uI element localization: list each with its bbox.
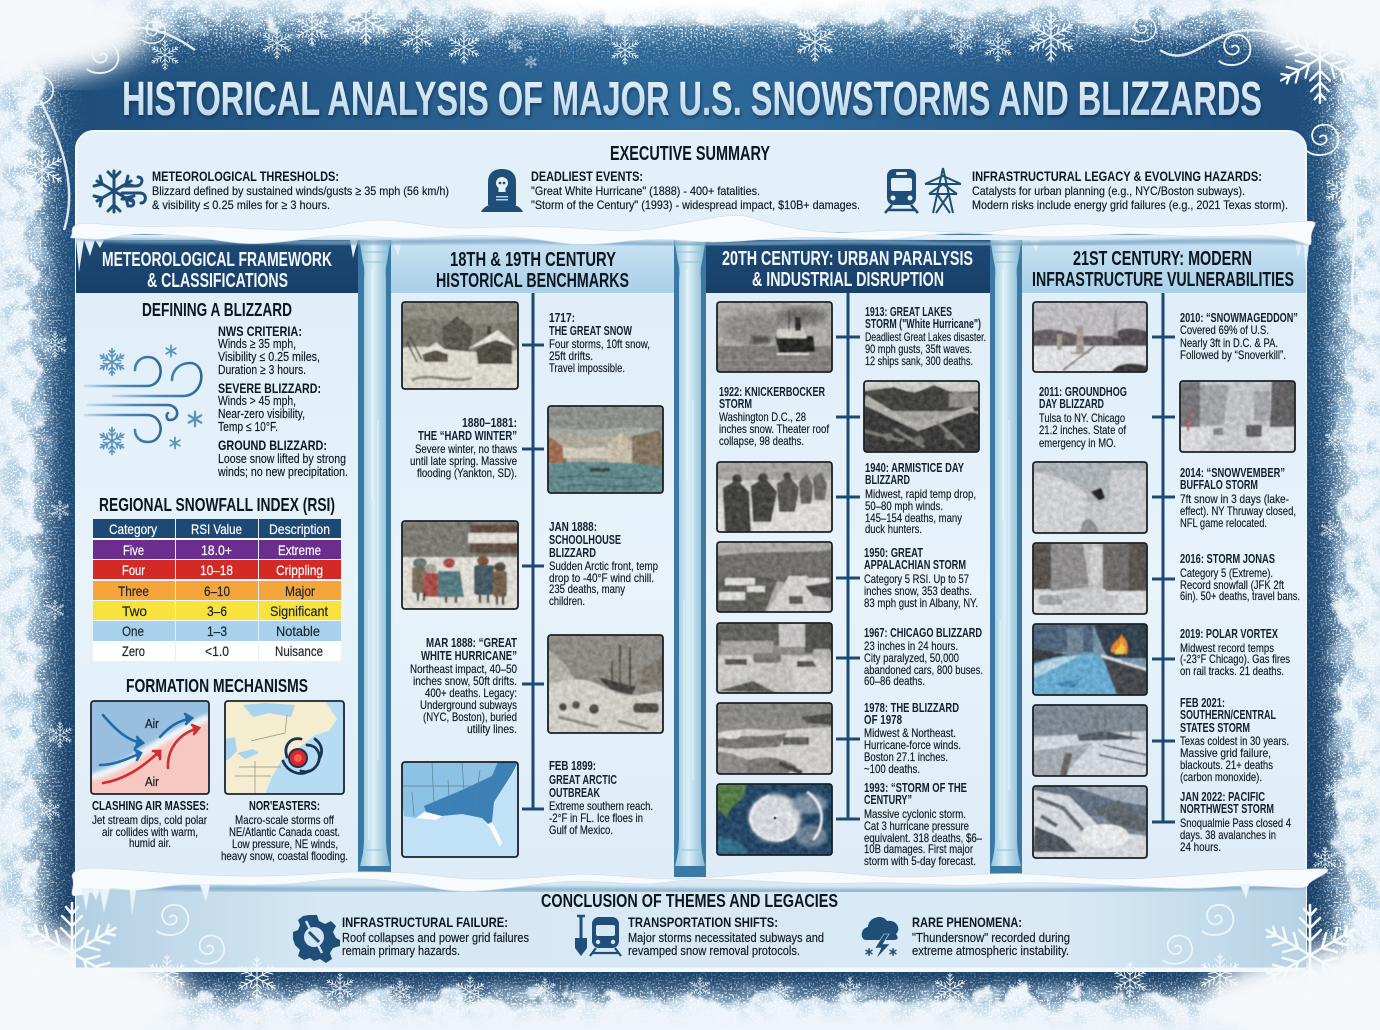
table: RSI categories: Significant — [270, 603, 328, 619]
text: rare phenomena: RARE PHENOMENA: — [912, 914, 1022, 930]
text: infrastructural failure: INFRASTRUCTURAL FAILURE: — [342, 914, 508, 930]
heading band: column 1: METEOROLOGICAL FRAMEWORK — [102, 249, 332, 271]
spine and ticks — [522, 293, 544, 810]
timeline: 21st century — [1033, 293, 1300, 858]
text: nor'easters: NE/Atlantic Canada coast. — [229, 825, 340, 839]
text: NWS criteria — [218, 323, 320, 377]
heading: RSI: REGIONAL SNOWFALL INDEX (RSI) — [99, 494, 335, 515]
text: 2019 — [1180, 627, 1290, 678]
text: 1950 — [864, 546, 978, 610]
text: 1880-1881: flooding (Yankton, SD). — [417, 466, 517, 480]
text: 1717 — [549, 311, 650, 375]
table: RSI categories: 3–6 — [207, 603, 227, 619]
text: 1978: Hurricane-force winds. — [864, 738, 961, 752]
text: infrastructural failure: remain primary hazards. — [342, 943, 460, 958]
text: Feb 2021 — [1180, 696, 1289, 784]
text: infrastructural failure — [342, 914, 529, 958]
text: 1940: 50–80 mph winds. — [865, 499, 943, 513]
text: Feb 2021: Texas coldest in 30 years. — [1180, 734, 1289, 748]
text: severe blizzard: SEVERE BLIZZARD: — [218, 380, 321, 396]
text: 1978: Boston 27.1 inches. — [864, 750, 948, 764]
text: clashing air masses: air collides with warm, — [102, 825, 198, 839]
text: Feb 2021: STATES STORM — [1180, 721, 1250, 735]
text: Mar 1888: WHITE HURRICANE” — [421, 649, 517, 663]
text: Feb 1899: GREAT ARCTIC — [549, 773, 617, 787]
text: 1940: 1940: ARMISTICE DAY — [865, 461, 964, 475]
text: 2010: 2010: “SNOWMAGEDDON” — [1180, 311, 1298, 325]
text: severe blizzard: Winds > 45 mph, — [218, 393, 296, 408]
text: infrastructural legacy — [972, 168, 1288, 212]
text: ground blizzard: Loose snow lifted by strong — [218, 451, 346, 466]
table: RSI categories: Crippling — [276, 562, 323, 578]
photo: 1717 snowy cottages — [402, 302, 518, 389]
icon: shovel and train — [575, 916, 621, 956]
text: ground blizzard: GROUND BLIZZARD: — [218, 437, 327, 453]
table: RSI categories: 18.0+ — [201, 542, 232, 558]
text: 1913: 1913: GREAT LAKES — [865, 305, 952, 319]
text: deadliest events — [531, 168, 860, 212]
photo: Mar 1888 ships in snow — [548, 635, 663, 733]
table: RSI categories: Category — [109, 521, 157, 537]
table: RSI categories: Three — [118, 583, 149, 599]
text: 2016: Record snowfall (JFK 2ft — [1180, 578, 1285, 592]
text: severe blizzard: Near-zero visibility, — [218, 406, 305, 421]
heading band: column 1 — [76, 238, 358, 293]
text: 1880-1881: until late spring. Massive — [410, 454, 517, 468]
photo: 2021 power grid in ice — [1033, 705, 1147, 776]
text: 2014: effect). NY Thruway closed, — [1180, 504, 1296, 518]
text: 1978: OF 1978 — [864, 713, 902, 727]
text: 1717: 1717: — [549, 311, 575, 325]
diagram: clashing air masses: Air — [145, 774, 160, 789]
heading band: column 1: & CLASSIFICATIONS — [147, 270, 288, 292]
text: 2016: 2016: STORM JONAS — [1180, 552, 1275, 566]
text: 1978: Midwest & Northeast. — [864, 726, 956, 740]
heading band: column 2: HISTORICAL BENCHMARKS — [436, 270, 629, 292]
text: Feb 1899 — [549, 759, 653, 837]
photo: 1978 stormy coast — [717, 703, 832, 774]
text: clashing air masses: CLASHING AIR MASSES: — [92, 798, 209, 813]
pillar strips background — [76, 232, 1306, 877]
text: Feb 1899: FEB 1899: — [549, 759, 596, 773]
table: RSI categories: 6–10 — [204, 583, 230, 599]
text: 1717: Travel impossible. — [549, 361, 625, 375]
text: rare phenomena: extreme atmospheric instability. — [912, 943, 1069, 958]
heading band: column 2: 18TH & 19TH CENTURY — [450, 249, 616, 271]
text: Feb 2021: SOUTHERN/CENTRAL — [1180, 708, 1276, 722]
text: 1978: ~100 deaths. — [864, 762, 920, 776]
icon: tombstone — [481, 169, 523, 212]
photo: 2019 frozen tracks with fire — [1033, 624, 1147, 695]
timeline: 20th century — [717, 293, 986, 868]
text: 2011: 21.2 inches. State of — [1039, 423, 1127, 437]
diagram: clashing air masses — [91, 701, 209, 794]
text: Jan 2022: days. 38 avalanches in — [1180, 828, 1276, 842]
ice pillars — [359, 238, 1022, 866]
text: 1913: Deadliest Great Lakes disaster. — [865, 330, 986, 344]
text: NWS criteria: Visibility ≤ 0.25 miles, — [218, 349, 320, 364]
text: meteorological thresholds: & visibility ≤ 0.25 miles for ≥ 3 hours. — [152, 198, 330, 212]
map: 1899 arctic outbreak — [402, 762, 518, 857]
panel: executive summary — [94, 143, 1288, 213]
photo: 2014 snow walls — [1033, 462, 1147, 533]
text: transportation shifts: TRANSPORTATION SHIFTS: — [628, 914, 778, 930]
text: NWS criteria: NWS CRITERIA: — [218, 323, 302, 339]
text: 2010 — [1180, 311, 1298, 362]
text: ground blizzard: winds; no new precipitation. — [217, 464, 348, 479]
panel: column 2 body — [391, 292, 674, 877]
text: deadliest events: DEADLIEST EVENTS: — [531, 168, 643, 184]
section: defining a blizzard — [85, 299, 348, 479]
text: 1922: STORM — [719, 397, 752, 411]
diagram: clashing air masses: Air — [145, 716, 160, 731]
table: RSI categories — [93, 519, 341, 661]
text: Feb 1899: OUTBREAK — [549, 786, 600, 800]
text: ground blizzard — [217, 437, 348, 479]
text: 1940: BLIZZARD — [865, 473, 910, 487]
photo: 1880 flooded town — [548, 406, 663, 493]
photo: 1940 hunters in snow — [717, 462, 832, 532]
text: 1717: THE GREAT SNOW — [549, 324, 632, 338]
text: 1940: duck hunters. — [865, 522, 922, 536]
text: 1950: Category 5 RSI. Up to 57 — [864, 572, 969, 586]
spine and ticks — [1152, 293, 1175, 823]
text: 1993: equivalent. 318 deaths, $6– — [864, 831, 982, 845]
text: 2019: 2019: POLAR VORTEX — [1180, 627, 1278, 641]
heading: executive summary: EXECUTIVE SUMMARY — [610, 143, 770, 165]
illustration: blizzard wind and snowflakes — [85, 346, 201, 454]
text: severe blizzard: Temp ≤ 10°F. — [218, 419, 278, 434]
text: NWS criteria: Winds ≥ 35 mph, — [218, 336, 296, 351]
table: RSI categories: 10–18 — [200, 562, 233, 578]
text: 1922: inches snow. Theater roof — [719, 422, 830, 436]
text: 1940: Midwest, rapid temp drop, — [865, 487, 976, 501]
text: infrastructural failure: Roof collapses and power grid failures — [342, 930, 529, 945]
text: 1950: APPALACHIAN STORM — [864, 558, 966, 572]
table: RSI categories: Nuisance — [275, 643, 323, 659]
text: 1967: abandoned cars, 800 buses. — [864, 663, 983, 677]
text: nor'easters: heavy snow, coastal flooding. — [221, 849, 348, 863]
photo: 1888 children in snow — [402, 521, 518, 609]
table: RSI categories: Four — [122, 562, 145, 578]
icon: thundersnow cloud — [862, 917, 898, 959]
text: 2014 — [1180, 466, 1296, 530]
text: transportation shifts: revamped snow removal protocols. — [628, 943, 800, 958]
text: clashing air masses — [92, 798, 209, 850]
text: 1967: 23 inches in 24 hours. — [864, 639, 958, 653]
heading band: column 4: 21ST CENTURY: MODERN — [1073, 248, 1252, 270]
text: 1993: Massive cyclonic storm. — [864, 807, 966, 821]
text: transportation shifts — [628, 914, 824, 958]
text: 1940 — [865, 461, 976, 536]
text: 1922: collapse, 98 deaths. — [719, 434, 804, 448]
heading band: column 3: & INDUSTRIAL DISRUPTION — [752, 269, 944, 291]
table: RSI categories: Two — [122, 603, 147, 619]
heading band: column 3: 20TH CENTURY: URBAN PARALYSIS — [722, 248, 973, 270]
text: transportation shifts: Major storms necessitated subways and — [628, 930, 824, 945]
text: Jan 2022: Snoqualmie Pass closed 4 — [1180, 816, 1291, 830]
text: nor'easters: NOR'EASTERS: — [249, 798, 320, 813]
text: 2010: Nearly 3ft in D.C. & PA. — [1180, 336, 1278, 350]
text: 1967: City paralyzed, 50,000 — [864, 651, 959, 665]
text: Jan 2022: 24 hours. — [1180, 840, 1221, 854]
text: 1922: Washington D.C., 28 — [719, 410, 806, 424]
heading: conclusion: CONCLUSION OF THEMES AND LEGACIES — [541, 890, 838, 911]
text: deadliest events: "Storm of the Century" (1993) - widespread impact, $10B+ damages. — [531, 198, 860, 212]
table: RSI categories: 1–3 — [207, 623, 227, 639]
text: nor'easters: Macro-scale storms off — [235, 813, 335, 827]
text: 1913 — [865, 305, 986, 368]
text: meteorological thresholds — [152, 168, 449, 212]
text: Feb 1899: -2°F in FL. Ice floes in — [549, 811, 643, 825]
text: Jan 2022 — [1180, 790, 1291, 854]
text: 2014: 2014: “SNOWVEMBER” — [1180, 466, 1285, 480]
text: 1880-1881: 1880–1881: — [462, 416, 517, 430]
text: Mar 1888: Underground subways — [420, 698, 517, 712]
text: Jan 1888: 235 deaths, many — [549, 582, 625, 596]
icon: snowflake with wind — [94, 171, 145, 212]
panel: column 3 body — [706, 292, 990, 877]
text: 1967: 60–86 deaths. — [864, 674, 925, 688]
text: Jan 1888: drop to -40°F wind chill. — [549, 571, 654, 585]
text: 2010: Followed by “Snoverkill”. — [1180, 348, 1286, 362]
map: nor'easter — [225, 701, 344, 794]
text: Mar 1888: utility lines. — [467, 722, 517, 736]
text: 1880-1881: THE “HARD WINTER” — [418, 429, 517, 443]
text: 1950: 83 mph gust in Albany, NY. — [864, 596, 978, 610]
text: clashing air masses: Jet stream dips, cold polar — [92, 813, 207, 827]
text: 1913: 90 mph gusts, 35ft waves. — [865, 342, 972, 356]
text: Jan 1888: BLIZZARD — [549, 546, 596, 560]
text: 2019: (-23°F Chicago). Gas fires — [1180, 652, 1290, 666]
text: clashing air masses: humid air. — [129, 836, 171, 850]
heading band: column 3 — [706, 238, 990, 293]
photo: 2022 avalanche — [1033, 786, 1147, 858]
text: 1880-1881: Severe winter, no thaws — [415, 442, 517, 456]
text: 1880-1881 — [410, 416, 517, 480]
text: 2016: Category 5 (Extreme). — [1180, 566, 1273, 580]
text: Mar 1888: inches snow, 50ft drifts. — [413, 674, 517, 688]
text: infrastructural legacy: Modern risks include energy grid failures (e.g., 2021 Texas storm). — [972, 198, 1288, 212]
timeline: 18th and 19th century — [402, 293, 663, 857]
photo: 2011 snowy avenue — [1180, 381, 1295, 452]
text: meteorological thresholds: METEOROLOGICAL THRESHOLDS: — [152, 168, 339, 184]
text: severe blizzard — [218, 380, 321, 434]
table: RSI categories: Five — [123, 542, 144, 558]
text: 2019: Midwest record temps — [1180, 641, 1274, 655]
text: 2011: emergency in MO. — [1039, 436, 1116, 450]
text: nor'easters — [221, 798, 348, 863]
photo: 1913 steamship — [717, 302, 832, 372]
text: 1967 — [864, 626, 983, 688]
text: 1913: 12 ships sank, 300 deaths. — [865, 354, 973, 368]
heading: defining a blizzard: DEFINING A BLIZZARD — [142, 299, 292, 320]
text: 2016: 6in). 50+ deaths, travel bans. — [1180, 589, 1300, 603]
text: Mar 1888: MAR 1888: “GREAT — [426, 636, 517, 650]
text: 1993: Cat 3 hurricane pressure — [864, 819, 969, 833]
text: Feb 2021: (carbon monoxide). — [1180, 770, 1262, 784]
panel: column 1 body — [76, 292, 358, 877]
text: 1717: 25ft drifts. — [549, 349, 593, 363]
frost snowflakes and swirls, bottom corners — [23, 903, 1359, 1008]
text: Jan 1888 — [549, 520, 658, 608]
photo: 1950 snowy town — [717, 542, 832, 612]
text: 1950: inches snow, 353 deaths. — [864, 584, 972, 598]
text: 1993: 1993: “STORM OF THE — [864, 781, 967, 795]
snow ledge: bottom — [72, 868, 1328, 896]
text: Jan 1888: JAN 1888: — [549, 520, 597, 534]
table: RSI categories: Notable — [276, 623, 320, 639]
icon: broken gear — [293, 915, 340, 963]
spine and ticks — [836, 293, 860, 820]
text: 1978 — [864, 701, 961, 776]
text: nor'easters: Low pressure, NE winds, — [232, 837, 338, 851]
text: 1922: 1922: KNICKERBOCKER — [719, 385, 825, 399]
table: RSI categories: <1.0 — [205, 643, 229, 659]
text: 2011: 2011: GROUNDHOG — [1039, 385, 1127, 399]
text: 1940: 145–154 deaths, many — [865, 511, 962, 525]
table: RSI categories: Major — [285, 583, 315, 599]
text: 1950: 1950: GREAT — [864, 546, 923, 560]
text: Mar 1888: Northeast impact, 40–50 — [410, 662, 517, 676]
photo: 1922 collapsed theater — [864, 381, 979, 452]
text: meteorological thresholds: Blizzard defined by sustained winds/gusts ≥ 35 mph (56 km/h) — [152, 184, 449, 198]
text: 2014: BUFFALO STORM — [1180, 478, 1258, 492]
text: 2011 — [1039, 385, 1127, 450]
text: rare phenomena — [912, 914, 1070, 958]
text: deadliest events: "Great White Hurricane" (1888) - 400+ fatalities. — [531, 184, 760, 198]
snow ledge: top with icicles — [70, 215, 1315, 272]
text: Mar 1888 — [410, 636, 517, 736]
table: RSI categories: RSI Value — [191, 521, 242, 537]
text: 2011: DAY BLIZZARD — [1039, 397, 1104, 411]
text: 1717: Four storms, 10ft snow, — [549, 337, 650, 351]
text: Jan 2022: NORTHWEST STORM — [1180, 802, 1274, 816]
text: 2011: Tulsa to NY. Chicago — [1039, 411, 1125, 425]
photo: 1967 Chicago cars — [717, 623, 832, 693]
text: NWS criteria: Duration ≥ 3 hours. — [218, 362, 306, 377]
text: 1993: 10B damages. First major — [864, 842, 973, 856]
text: 1993: CENTURY” — [864, 793, 912, 807]
text: infrastructural legacy: INFRASTRUCTURAL LEGACY & EVOLVING HAZARDS: — [972, 168, 1262, 184]
icon: train — [885, 169, 918, 213]
table: RSI categories: Zero — [122, 643, 145, 659]
text: 1993 — [864, 781, 982, 868]
photo: 1993 satellite hurricane — [717, 784, 832, 855]
text: Feb 1899: Gulf of Mexico. — [549, 823, 613, 837]
table: RSI categories: Description — [269, 521, 330, 537]
text: 2019: on rail tracks. 21 deaths. — [1180, 664, 1284, 678]
text: Feb 2021: blackouts. 21+ deaths — [1180, 758, 1273, 772]
icon: power tower — [925, 168, 961, 213]
panel: main sheet — [76, 131, 1306, 971]
text: 2016 — [1180, 552, 1300, 603]
text: Feb 1899: Extreme southern reach. — [549, 799, 653, 813]
text: Mar 1888: (NYC, Boston), buried — [423, 710, 517, 724]
text: 1993: storm with 5-day forecast. — [864, 854, 976, 868]
text: Mar 1888: 400+ deaths. Legacy: — [425, 686, 517, 700]
text: 2010: Covered 69% of U.S. — [1180, 323, 1269, 337]
heading band: column 2 — [391, 238, 674, 293]
table: RSI categories: Extreme — [278, 542, 321, 558]
text: Jan 2022: JAN 2022: PACIFIC — [1180, 790, 1265, 804]
panel: column 4 body — [1022, 292, 1306, 877]
text: 2014: NFL game relocated. — [1180, 516, 1267, 530]
photo: 2016 NYC street — [1033, 543, 1147, 614]
text: Feb 2021: Massive grid failure, — [1180, 746, 1271, 760]
text: 1967: 1967: CHICAGO BLIZZARD — [864, 626, 982, 640]
icicles: bottom left and right — [82, 884, 1250, 915]
text: infrastructural legacy: Catalysts for urban planning (e.g., NYC/Boston subways). — [972, 184, 1245, 198]
text: Jan 1888: Sudden Arctic front, temp — [549, 559, 658, 573]
text: 1922 — [719, 385, 830, 448]
text: Jan 1888: children. — [549, 594, 585, 608]
section: formation mechanisms — [91, 675, 348, 863]
text: 2014: 7ft snow in 3 days (lake- — [1180, 492, 1289, 506]
photo: 2010 Washington monument — [1033, 302, 1147, 372]
text: Jan 1888: SCHOOLHOUSE — [549, 533, 621, 547]
text: Feb 2021: FEB 2021: — [1180, 696, 1225, 710]
table: RSI categories: One — [122, 623, 144, 639]
section: regional snowfall index — [93, 494, 341, 661]
panel: conclusion — [72, 868, 1328, 970]
text: 1978: 1978: THE BLIZZARD — [864, 701, 959, 715]
text: rare phenomena: "Thundersnow" recorded during — [912, 930, 1070, 945]
text: 1913: STORM ("White Hurricane") — [865, 317, 981, 331]
heading: formation mechanisms: FORMATION MECHANISMS — [126, 675, 308, 696]
heading band: column 4 — [1022, 238, 1306, 293]
